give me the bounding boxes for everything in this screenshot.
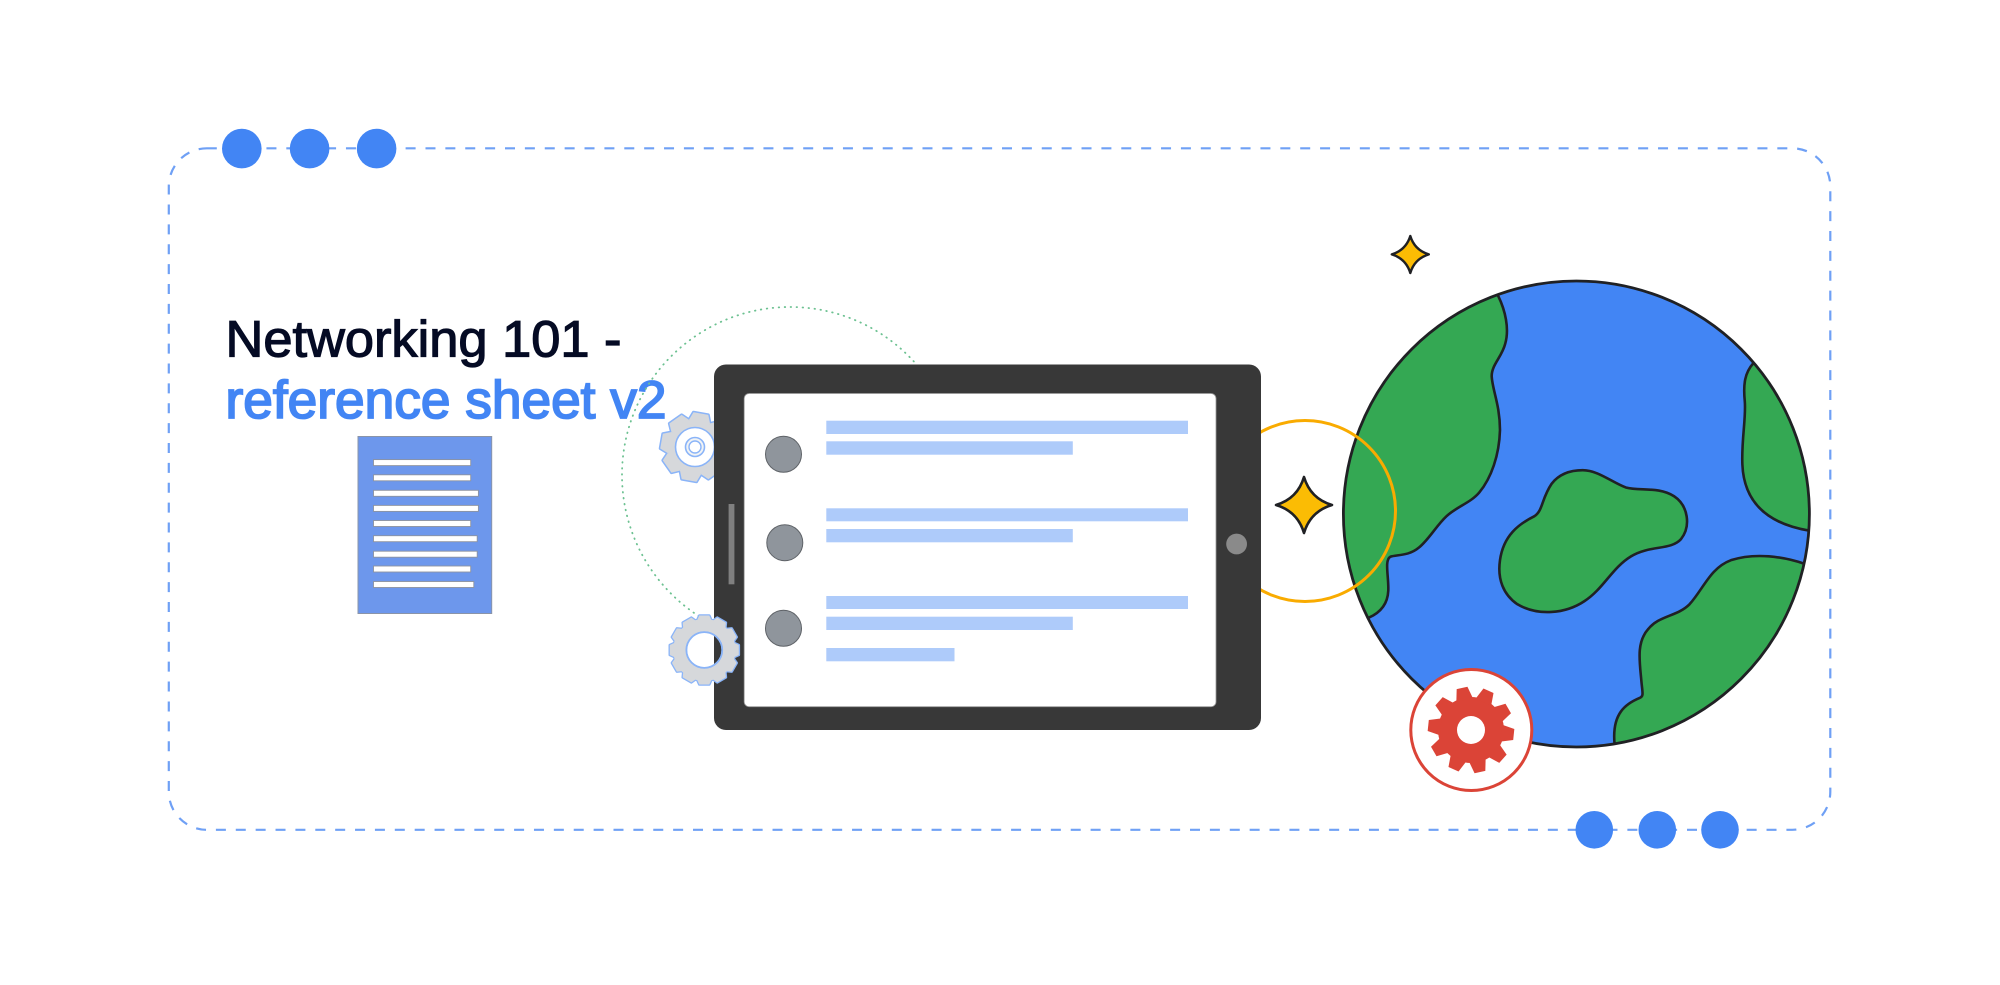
globe <box>1342 280 1811 748</box>
tablet speaker bar <box>729 504 734 584</box>
title: Networking 101 - <box>226 310 622 368</box>
illustration canvas <box>168 128 1832 849</box>
icon: gray gear over tablet <box>670 616 739 684</box>
dotted orbit circle <box>622 307 958 643</box>
icon: large sparkle star <box>1276 477 1332 533</box>
bottom-right three dots <box>1576 811 1739 849</box>
top-left three dots <box>222 129 396 168</box>
list text bars <box>826 421 1188 661</box>
title: reference sheet v2 <box>226 371 666 430</box>
tablet screen <box>744 394 1216 707</box>
dashed frame <box>169 148 1830 830</box>
list avatars <box>766 436 803 646</box>
tablet <box>714 364 1261 730</box>
title <box>226 310 666 430</box>
icon: document <box>358 436 492 614</box>
tablet home button <box>1226 534 1247 554</box>
icon: small sparkle star <box>1392 236 1429 273</box>
icon: red gear badge <box>1411 670 1532 790</box>
orange ring <box>1214 420 1396 602</box>
icon: gray gear behind tablet <box>660 412 730 482</box>
